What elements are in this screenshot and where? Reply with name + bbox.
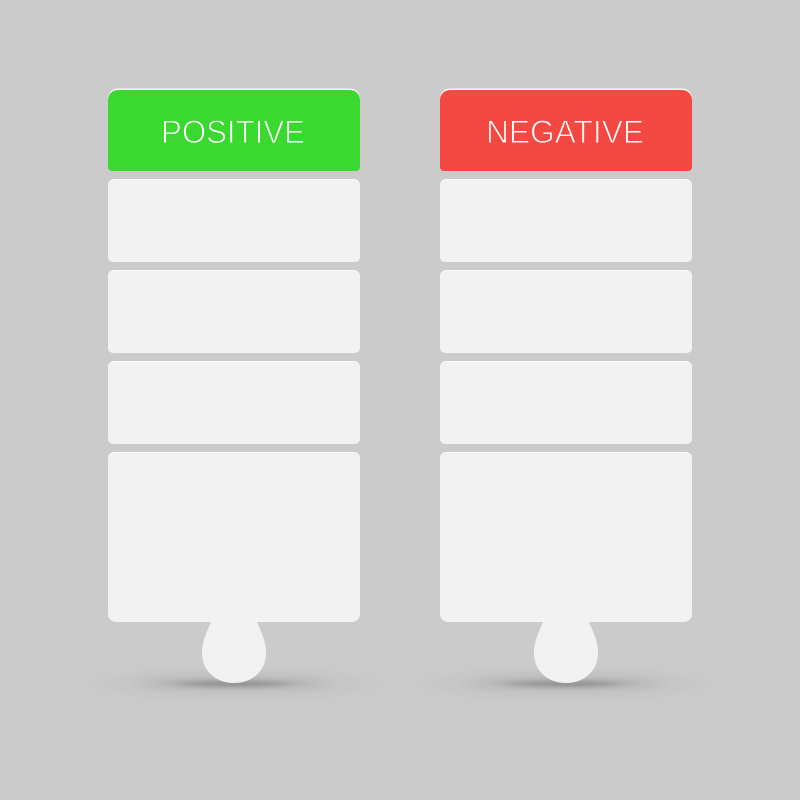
panel: negative column [425,88,705,694]
heading: NEGATIVE: NEGATIVE [486,114,644,150]
panel: positive column [94,88,374,694]
tag body with drop tab: positive [108,452,360,683]
row 3: positive [108,361,360,444]
header: negative [440,88,692,171]
row 1: positive [108,179,360,262]
heading: POSITIVE: POSITIVE [161,114,305,150]
row 2: positive [108,270,360,353]
tag body with drop tab: negative [440,452,692,683]
row 1: negative [440,179,692,262]
row 2: negative [440,270,692,353]
ground shadow: positive [94,674,374,694]
ground shadow: negative [425,674,705,694]
header: positive [108,88,360,171]
row 3: negative [440,361,692,444]
